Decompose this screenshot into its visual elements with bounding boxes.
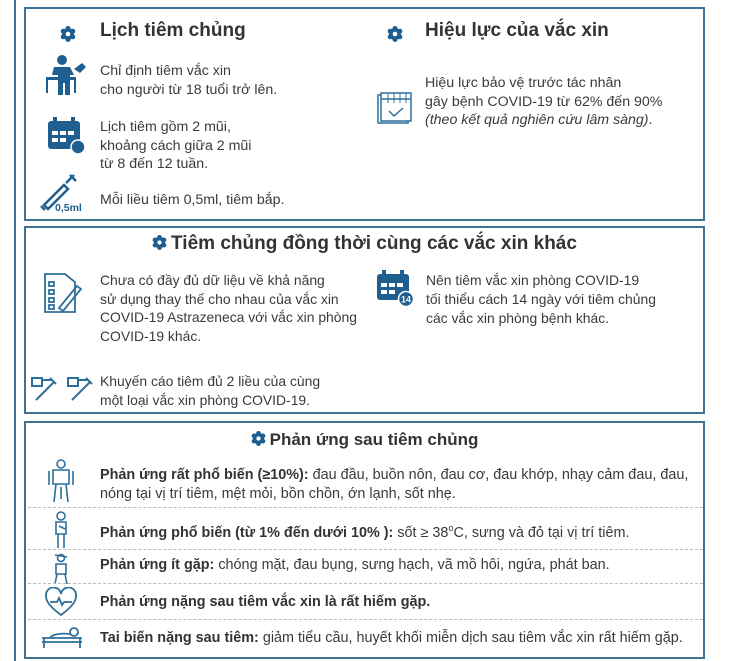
panel: co-administration bbox=[24, 226, 705, 414]
text: serious adverse: Tai biến nặng sau tiêm: giảm tiểu cầu, huyết khối miễn dịch sau tiêm vắc xin rất hiếm gặp. bbox=[100, 630, 683, 646]
text: same vaccine bbox=[100, 373, 320, 408]
text: 2 doses bbox=[100, 119, 251, 172]
icon: calendar 14: 14 bbox=[401, 294, 411, 304]
panel: adverse reactions bbox=[24, 421, 705, 659]
icon: body uncommon bbox=[54, 554, 68, 584]
text: 14 days: Nên tiêm vắc xin phòng COVID-19 bbox=[426, 272, 639, 288]
text: age: cho người từ 18 tuổi trở lên. bbox=[100, 82, 277, 98]
text: efficacy bbox=[425, 75, 662, 128]
text: interchangeability bbox=[100, 272, 357, 344]
text: very common bbox=[100, 467, 688, 502]
icon: heart bbox=[45, 587, 77, 616]
text: same vaccine: Khuyến cáo tiêm đủ 2 liều của cùng bbox=[100, 373, 320, 389]
heading: efficacy: Hiệu lực của vắc xin bbox=[425, 20, 609, 41]
text: efficacy: Hiệu lực bảo vệ trước tác nhân bbox=[425, 75, 621, 91]
text: severe rare: Phản ứng nặng sau tiêm vắc xin là rất hiếm gặp. bbox=[100, 594, 430, 610]
text: 2 doses: từ 8 đến 12 tuần. bbox=[100, 156, 208, 172]
text: interchangeability: COVID-19 Astrazeneca với vắc xin phòng bbox=[100, 309, 357, 325]
text: common: Phản ứng phổ biến (từ 1% đến dưới 10% ): sốt ≥ 38oC, sưng và đỏ tại vị trí tiêm. bbox=[100, 523, 629, 541]
text: age bbox=[100, 62, 277, 98]
icon: calendar bbox=[48, 117, 84, 154]
text: 14 days bbox=[426, 272, 656, 326]
text: very common: Phản ứng rất phổ biến (≥10%): đau đầu, buồn nôn, đau cơ, đau khớp, nhạy cảm đau, đau, bbox=[100, 467, 688, 483]
icon: person bbox=[46, 55, 86, 95]
text: very common: nóng tại vị trí tiêm, mệt mỏi, bồn chồn, ớn lạnh, sốt nhẹ. bbox=[100, 486, 456, 502]
text: efficacy: gây bệnh COVID-19 từ 62% đến 90% bbox=[425, 94, 662, 110]
heading: reactions: Phản ứng sau tiêm chủng bbox=[270, 430, 478, 449]
text: interchangeability: COVID-19 khác. bbox=[100, 328, 201, 344]
text: interchangeability: sử dụng thay thế cho nhau của vắc xin bbox=[100, 290, 339, 306]
icon: calendar 14 bbox=[377, 270, 413, 306]
icon: gear schedule bbox=[60, 26, 76, 42]
heading: schedule: Lịch tiêm chủng bbox=[100, 20, 246, 41]
text: age: Chỉ định tiêm vắc xin bbox=[100, 63, 231, 79]
icon: calendar check bbox=[377, 92, 412, 124]
text: 2 doses: khoảng cách giữa 2 mũi bbox=[100, 138, 251, 154]
text: 14 days: tối thiểu cách 14 ngày với tiêm chủng bbox=[426, 291, 656, 307]
text: 14 days: các vắc xin phòng bệnh khác. bbox=[426, 310, 609, 326]
icon: gear efficacy bbox=[388, 26, 402, 42]
text: dose: Mỗi liều tiêm 0,5ml, tiêm bắp. bbox=[100, 192, 285, 208]
text: 2 doses: Lịch tiêm gồm 2 mũi, bbox=[100, 119, 231, 135]
icon: two syringes bbox=[31, 377, 93, 401]
text: efficacy: (theo kết quả nghiên cứu lâm sàng). bbox=[425, 112, 652, 128]
icon: syringe 0,5ml bbox=[40, 174, 82, 214]
icon: body very common bbox=[48, 459, 74, 502]
text: interchangeability: Chưa có đầy đủ dữ liệu về khả năng bbox=[100, 272, 325, 288]
icon: body common bbox=[55, 511, 67, 548]
icon: checklist bbox=[44, 273, 82, 313]
text: uncommon: Phản ứng ít gặp: chóng mặt, đau bụng, sưng hạch, vã mồ hôi, ngứa, phát ban. bbox=[100, 557, 610, 573]
text: same vaccine: một loại vắc xin phòng COVID-19. bbox=[100, 392, 310, 408]
icon: syringe 0,5ml: 0,5ml bbox=[55, 202, 82, 214]
panel: vaccination schedule & efficacy bbox=[24, 7, 705, 221]
icon: bed bbox=[42, 627, 82, 648]
heading: co-administration: Tiêm chủng đồng thời cùng các vắc xin khác bbox=[171, 233, 577, 254]
